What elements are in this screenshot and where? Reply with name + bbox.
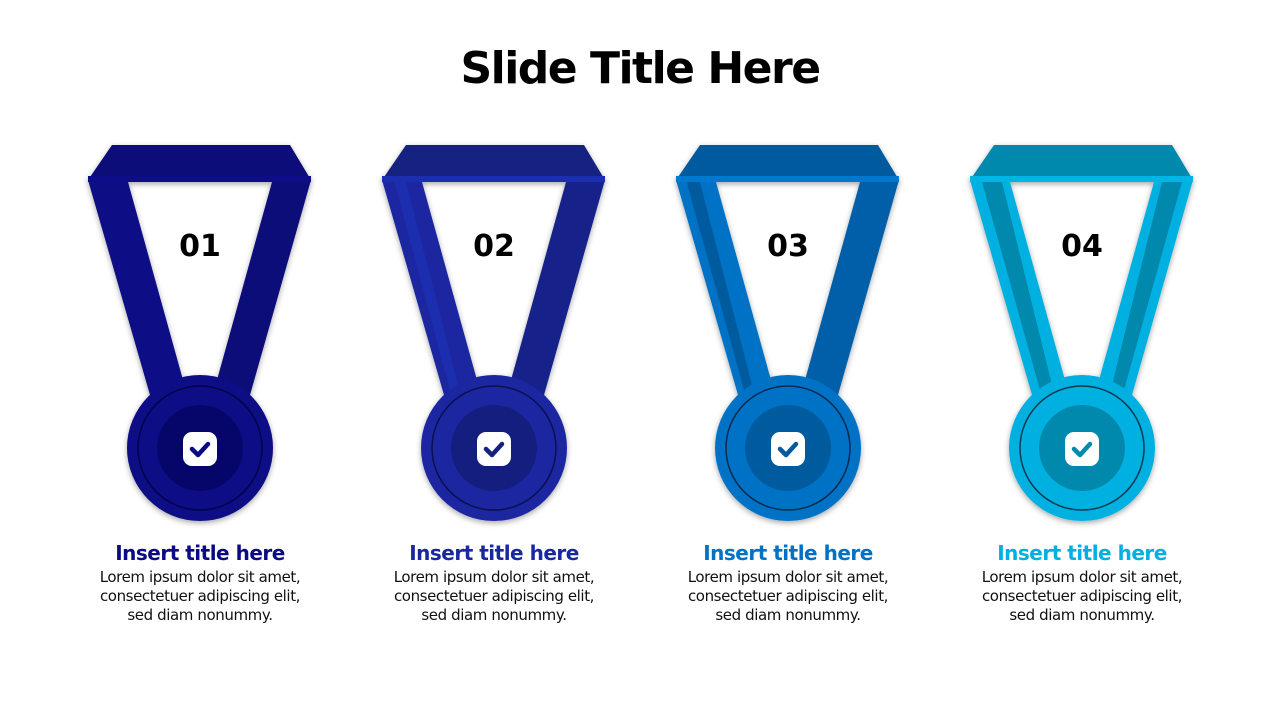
caption 01 [100, 541, 300, 624]
icon: check [771, 432, 805, 466]
number 03: 03 [767, 229, 809, 264]
caption 04: Insert title here [997, 541, 1167, 565]
caption 01: consectetuer adipiscing elit, [100, 587, 300, 605]
number 04: 04 [1061, 229, 1103, 264]
caption 03: Lorem ipsum dolor sit amet, [688, 568, 888, 586]
caption 01: sed diam nonummy. [127, 606, 273, 624]
caption 02 [394, 541, 594, 624]
number 02: 02 [473, 229, 515, 264]
icon: check [183, 432, 217, 466]
caption 03 [688, 541, 888, 624]
medal 04 [970, 145, 1193, 521]
caption 03: sed diam nonummy. [715, 606, 861, 624]
caption 04: consectetuer adipiscing elit, [982, 587, 1182, 605]
caption 04: sed diam nonummy. [1009, 606, 1155, 624]
caption 04: Lorem ipsum dolor sit amet, [982, 568, 1182, 586]
icon: check [1065, 432, 1099, 466]
number 01: 01 [179, 229, 221, 264]
icon: check [477, 432, 511, 466]
caption 02: Insert title here [409, 541, 579, 565]
caption 02: Lorem ipsum dolor sit amet, [394, 568, 594, 586]
medal 01 [88, 145, 311, 521]
caption 03: Insert title here [703, 541, 873, 565]
caption 02: sed diam nonummy. [421, 606, 567, 624]
medal 02 [382, 145, 605, 521]
caption 03: consectetuer adipiscing elit, [688, 587, 888, 605]
caption 04 [982, 541, 1182, 624]
caption 02: consectetuer adipiscing elit, [394, 587, 594, 605]
caption 01: Lorem ipsum dolor sit amet, [100, 568, 300, 586]
medal 03 [676, 145, 899, 521]
caption 01: Insert title here [115, 541, 285, 565]
title: Slide Title Here [460, 43, 820, 94]
